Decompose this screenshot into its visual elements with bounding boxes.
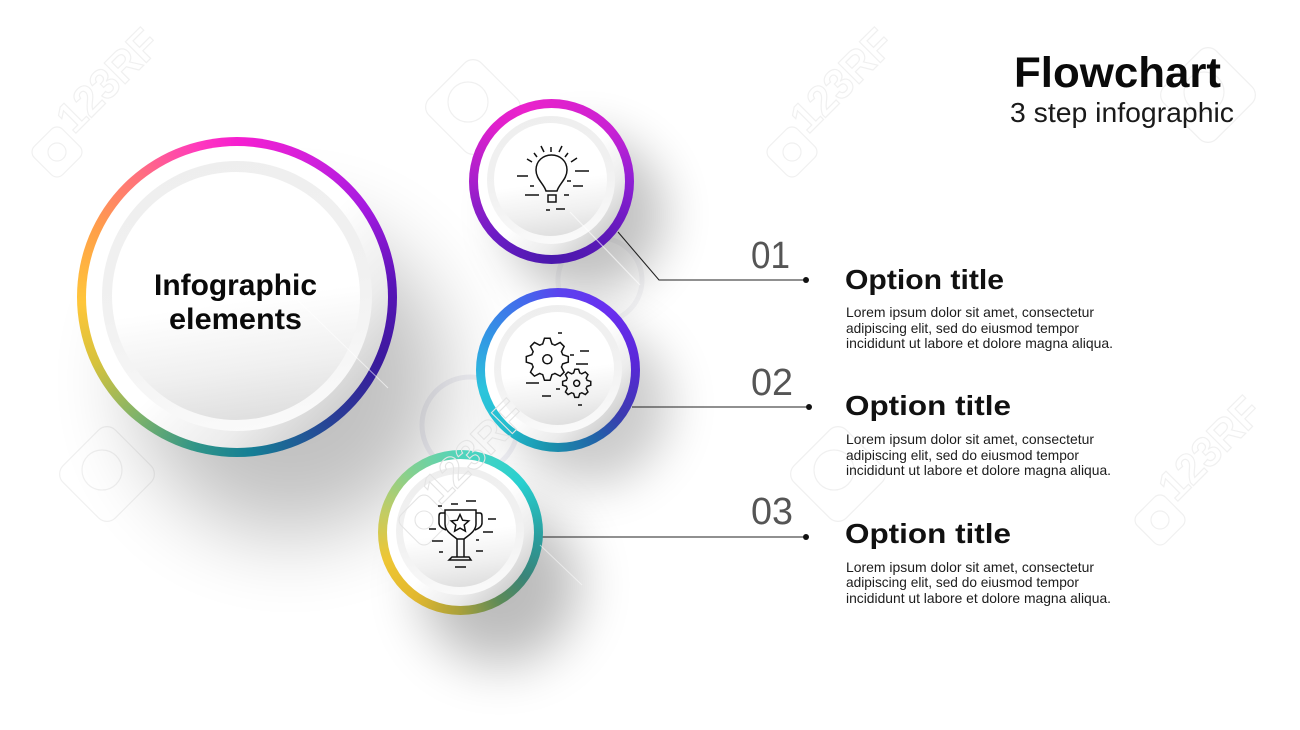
subtitle: 3 step infographic: 3 step infographic bbox=[1010, 97, 1234, 128]
step 01 text: 01 bbox=[751, 235, 790, 277]
main circle label: elements bbox=[169, 303, 302, 336]
background watermark marks: 123RF bbox=[47, 20, 169, 142]
step 03 text: incididunt ut labore et dolore magna aliqua. bbox=[846, 591, 1111, 606]
step 03 text: Option title bbox=[845, 518, 1011, 549]
main circle label: Infographic bbox=[154, 269, 317, 302]
step 2 circle bbox=[476, 288, 640, 452]
step 02 text: Option title bbox=[845, 390, 1011, 421]
step 03 text: Lorem ipsum dolor sit amet, consectetur bbox=[846, 560, 1094, 575]
background watermark marks: 123RF bbox=[781, 20, 903, 142]
step 03 text: 03 bbox=[751, 491, 793, 533]
step 3 circle bbox=[378, 450, 543, 615]
step 01 text: Lorem ipsum dolor sit amet, consectetur bbox=[846, 305, 1094, 320]
step 01 text: adipiscing elit, sed do eiusmod tempor bbox=[846, 321, 1079, 336]
step 02 text: Lorem ipsum dolor sit amet, consectetur bbox=[846, 432, 1094, 447]
main circle: infographic elements bbox=[77, 137, 397, 457]
step 02 text: 02 bbox=[751, 362, 793, 404]
title: Flowchart: Flowchart bbox=[1014, 49, 1221, 97]
thin light reflections and overlaid watermark: 123RF bbox=[413, 391, 535, 513]
step 02 text: adipiscing elit, sed do eiusmod tempor bbox=[846, 448, 1079, 463]
background watermark marks: 123RF bbox=[1149, 388, 1271, 510]
step 01 text: incididunt ut labore et dolore magna aliqua. bbox=[846, 336, 1113, 351]
step 02 text: incididunt ut labore et dolore magna aliqua. bbox=[846, 463, 1111, 478]
step 1 circle bbox=[469, 99, 634, 264]
step 01 text: Option title bbox=[845, 264, 1004, 295]
step 03 text: adipiscing elit, sed do eiusmod tempor bbox=[846, 575, 1079, 590]
